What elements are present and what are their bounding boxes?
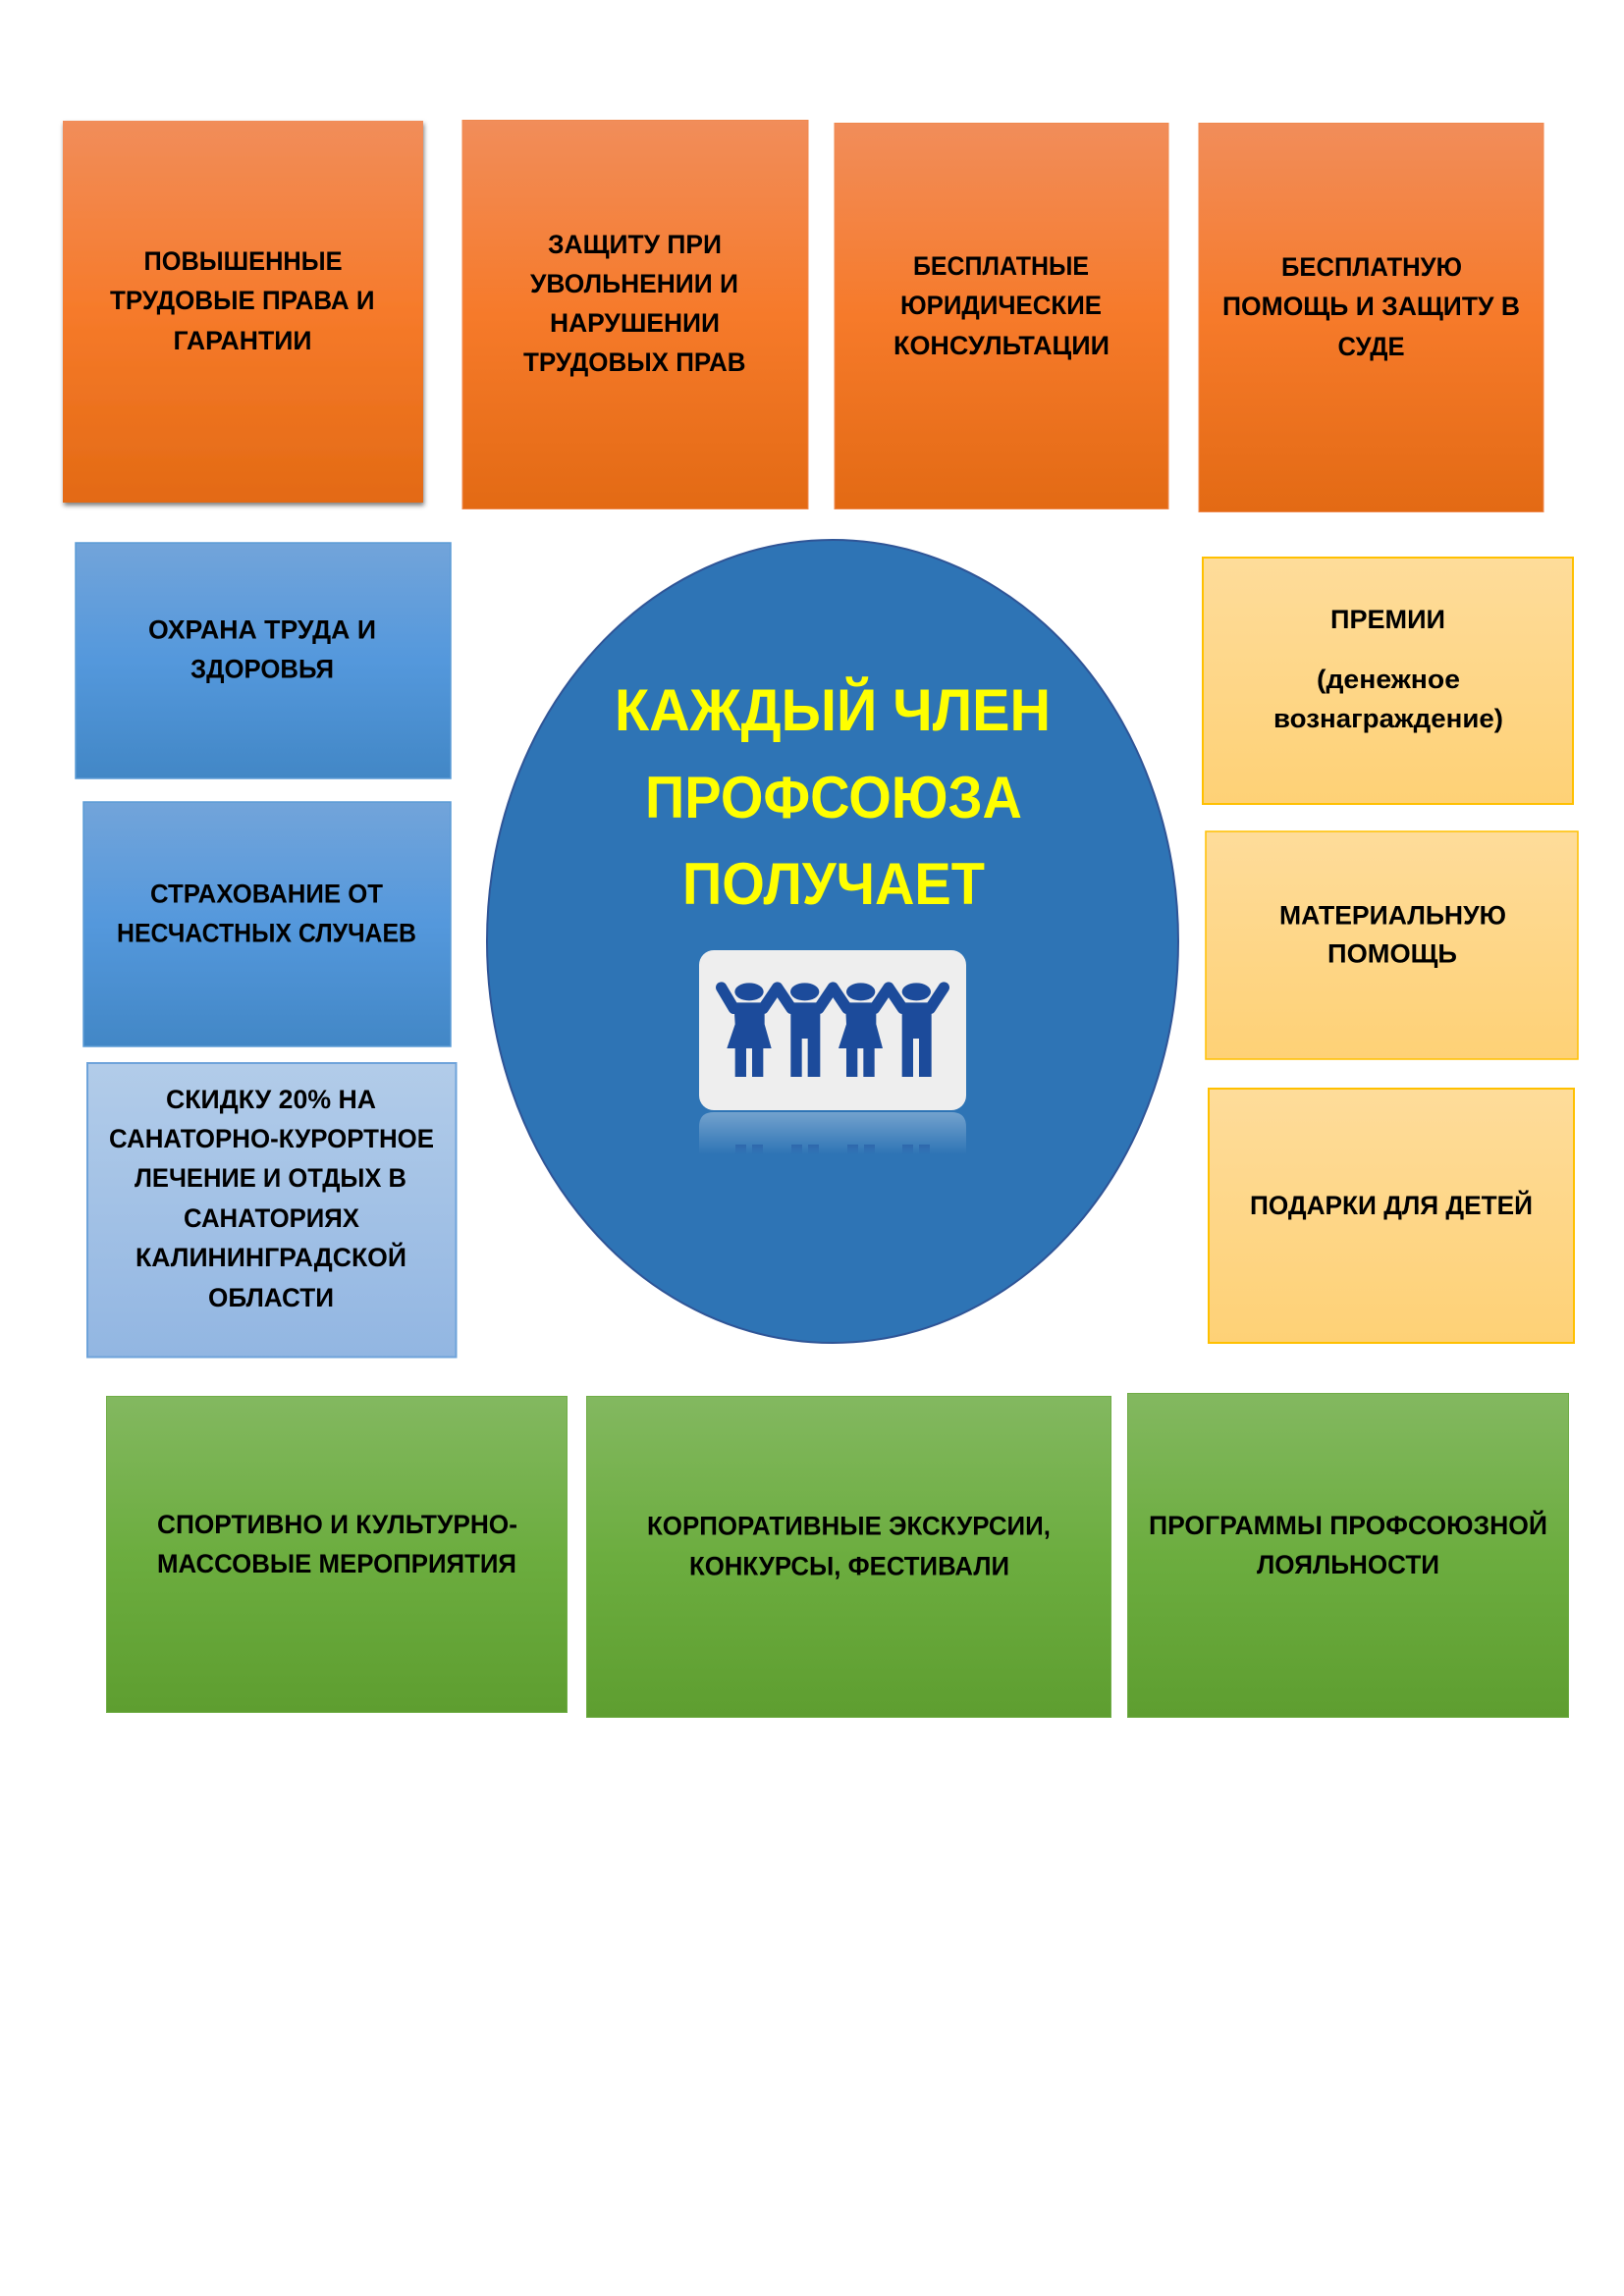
panel: защита при увольнении: УВОЛЬНЕНИИ И [530, 269, 738, 298]
panel: бесплатная помощь в суде [1199, 124, 1543, 512]
panel: защита при увольнении: НАРУШЕНИИ [550, 308, 720, 338]
panel: скидка на санаторно-курортное лечение: ОБЛАСТИ [208, 1283, 334, 1312]
panel: защита при увольнении: ЗАЩИТУ ПРИ [548, 230, 722, 259]
panel: охрана труда [76, 543, 451, 778]
panel: страхование [83, 802, 451, 1046]
panel: защита при увольнении: ТРУДОВЫХ ПРАВ [523, 347, 746, 377]
panel: скидка на санаторно-курортное лечение [87, 1063, 456, 1357]
panel: бесплатная помощь в суде: СУДЕ [1337, 332, 1404, 361]
title: ПРОФСОЮЗА [645, 765, 1022, 830]
panel: материальная помощь: МАТЕРИАЛЬНУЮ [1279, 901, 1506, 931]
panel: премии: ПРЕМИИ [1330, 605, 1445, 634]
central ellipse panel [487, 540, 1178, 1343]
panel: бесплатные юридические консультации: БЕСПЛАТНЫЕ [913, 251, 1089, 281]
panel: программы лояльности: ЛОЯЛЬНОСТИ [1257, 1550, 1439, 1579]
panel: корпоративные экскурсии: КОРПОРАТИВНЫЕ ЭКСКУРСИИ, [647, 1512, 1051, 1541]
panel: подарки для детей [1209, 1089, 1574, 1343]
panel: охрана труда: ОХРАНА ТРУДА И [148, 614, 376, 644]
panel: бесплатная помощь в суде: ПОМОЩЬ И ЗАЩИТУ В [1222, 292, 1520, 321]
panel: премии: (денежное [1317, 665, 1460, 694]
icon reflection [699, 1112, 966, 1154]
panel: защита при увольнении [462, 120, 808, 508]
panel: бесплатные юридические консультации: КОНСУЛЬТАЦИИ [893, 331, 1110, 360]
panel: спортивные мероприятия: МАССОВЫЕ МЕРОПРИЯТИЯ [157, 1549, 516, 1578]
panel: спортивные мероприятия [106, 1396, 568, 1712]
icon: four people holding hands [699, 950, 966, 1110]
panel: повышенные трудовые права: ПОВЫШЕННЫЕ [143, 246, 342, 276]
panel: скидка на санаторно-курортное лечение: КАЛИНИНГРАДСКОЙ [135, 1242, 406, 1272]
panel: программы лояльности: ПРОГРАММЫ ПРОФСОЮЗНОЙ [1149, 1510, 1547, 1540]
panel: скидка на санаторно-курортное лечение: ЛЕЧЕНИЕ И ОТДЫХ В [135, 1163, 406, 1193]
panel: премии [1203, 558, 1573, 804]
panel: материальная помощь [1206, 831, 1578, 1059]
title: КАЖДЫЙ ЧЛЕН [615, 677, 1051, 743]
panel: охрана труда: ЗДОРОВЬЯ [190, 654, 334, 683]
panel: повышенные трудовые права [63, 121, 423, 503]
panel: бесплатные юридические консультации: ЮРИДИЧЕСКИЕ [900, 291, 1102, 320]
title [615, 677, 1051, 917]
panel: программы лояльности [1127, 1394, 1569, 1718]
panel: повышенные трудовые права: ГАРАНТИИ [173, 326, 312, 355]
panel: подарки для детей: ПОДАРКИ ДЛЯ ДЕТЕЙ [1250, 1190, 1533, 1220]
panel: бесплатная помощь в суде: БЕСПЛАТНУЮ [1281, 252, 1462, 282]
panel: скидка на санаторно-курортное лечение: СКИДКУ 20% НА [166, 1085, 376, 1114]
panel: спортивные мероприятия: СПОРТИВНО И КУЛЬТУРНО- [157, 1510, 517, 1539]
panel: страхование: НЕСЧАСТНЫХ СЛУЧАЕВ [117, 919, 416, 948]
panel: премии: вознаграждение) [1273, 704, 1503, 733]
panel: страхование: СТРАХОВАНИЕ ОТ [150, 880, 383, 909]
panel: материальная помощь: ПОМОЩЬ [1327, 938, 1457, 968]
title: ПОЛУЧАЕТ [682, 851, 985, 917]
panel: корпоративные экскурсии: КОНКУРСЫ, ФЕСТИВАЛИ [689, 1551, 1009, 1580]
panel: корпоративные экскурсии [587, 1396, 1111, 1718]
panel: скидка на санаторно-курортное лечение: САНАТОРИЯХ [184, 1203, 359, 1233]
panel: скидка на санаторно-курортное лечение: САНАТОРНО-КУРОРТНОЕ [109, 1124, 434, 1153]
panel: бесплатные юридические консультации [835, 124, 1168, 508]
panel: повышенные трудовые права: ТРУДОВЫЕ ПРАВА И [110, 286, 375, 315]
